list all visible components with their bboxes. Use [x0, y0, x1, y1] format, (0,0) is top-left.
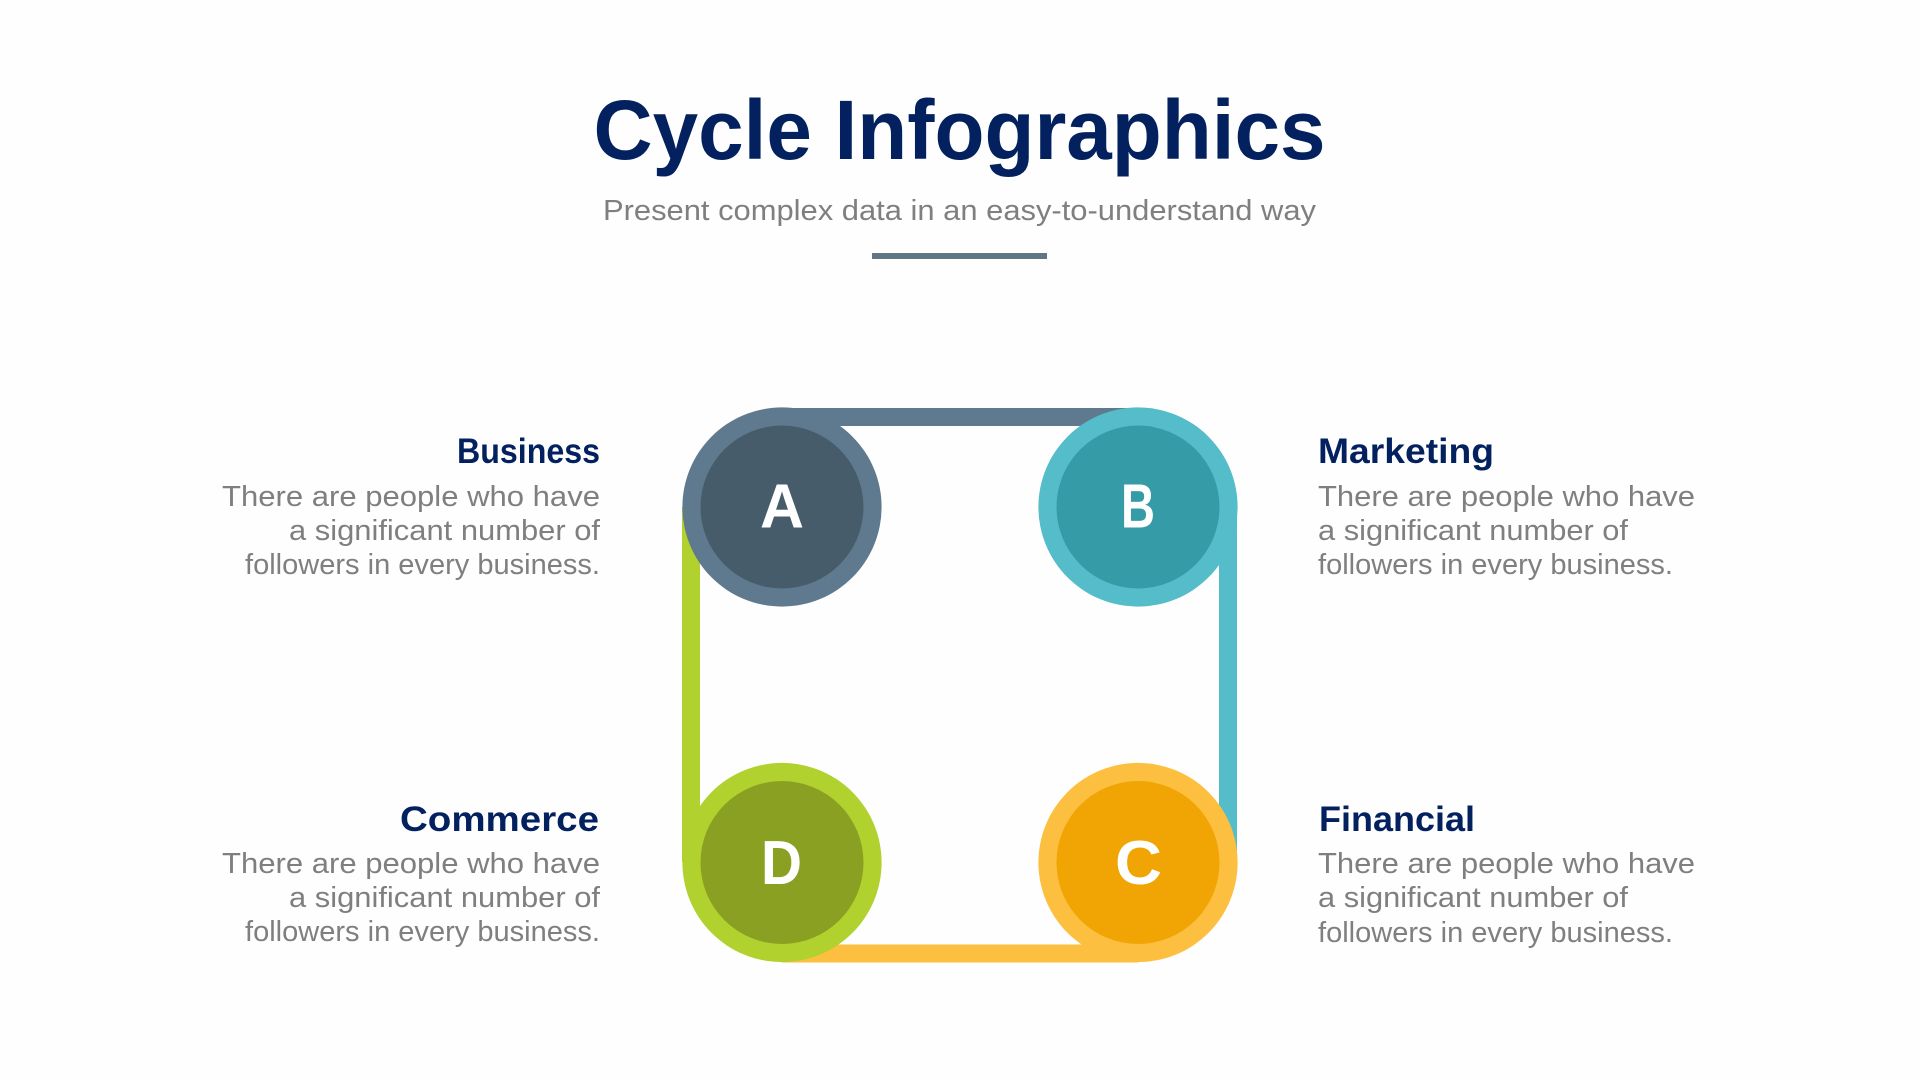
text block: Business: a significant number of: [289, 515, 601, 547]
node D: D: [761, 829, 802, 898]
text block: Commerce: a significant number of: [289, 882, 601, 914]
connector: D to A: [682, 507, 700, 862]
connector: A to B: [782, 408, 1138, 426]
text block: Business: There are people who have: [222, 481, 600, 513]
text block: Commerce: followers in every business.: [245, 916, 600, 948]
text block: Marketing: There are people who have: [1318, 481, 1695, 513]
node C: C: [1115, 829, 1162, 898]
text block: Marketing: a significant number of: [1318, 515, 1629, 547]
text block: Marketing: [1318, 432, 1695, 581]
node A: A: [760, 472, 804, 542]
text block: Marketing: Marketing: [1318, 432, 1494, 471]
title: Cycle Infographics: [594, 83, 1326, 177]
node B: [1038, 407, 1238, 607]
text block: Marketing: followers in every business.: [1318, 549, 1673, 581]
text block: Business: Business: [457, 432, 600, 471]
text block: Financial: There are people who have: [1318, 848, 1695, 880]
text block: Business: [222, 432, 601, 581]
text block: Financial: a significant number of: [1318, 882, 1629, 914]
connector: B to C: [1219, 507, 1237, 862]
node B: B: [1121, 472, 1155, 542]
node A: [682, 407, 882, 607]
subtitle: Present complex data in an easy-to-understand way: [603, 195, 1317, 227]
text block: Commerce: [222, 800, 601, 948]
cycle diagram: [682, 407, 1238, 962]
node C: [1038, 763, 1238, 962]
text block: Financial: Financial: [1319, 800, 1475, 839]
title underline: [872, 253, 1047, 259]
text block: Financial: followers in every business.: [1318, 917, 1673, 949]
connector: C to D: [782, 944, 1138, 962]
text block: Business: followers in every business.: [245, 549, 600, 581]
node D: [682, 763, 882, 962]
text block: Financial: [1318, 800, 1695, 949]
text block: Commerce: Commerce: [400, 800, 599, 839]
text block: Commerce: There are people who have: [222, 848, 600, 880]
